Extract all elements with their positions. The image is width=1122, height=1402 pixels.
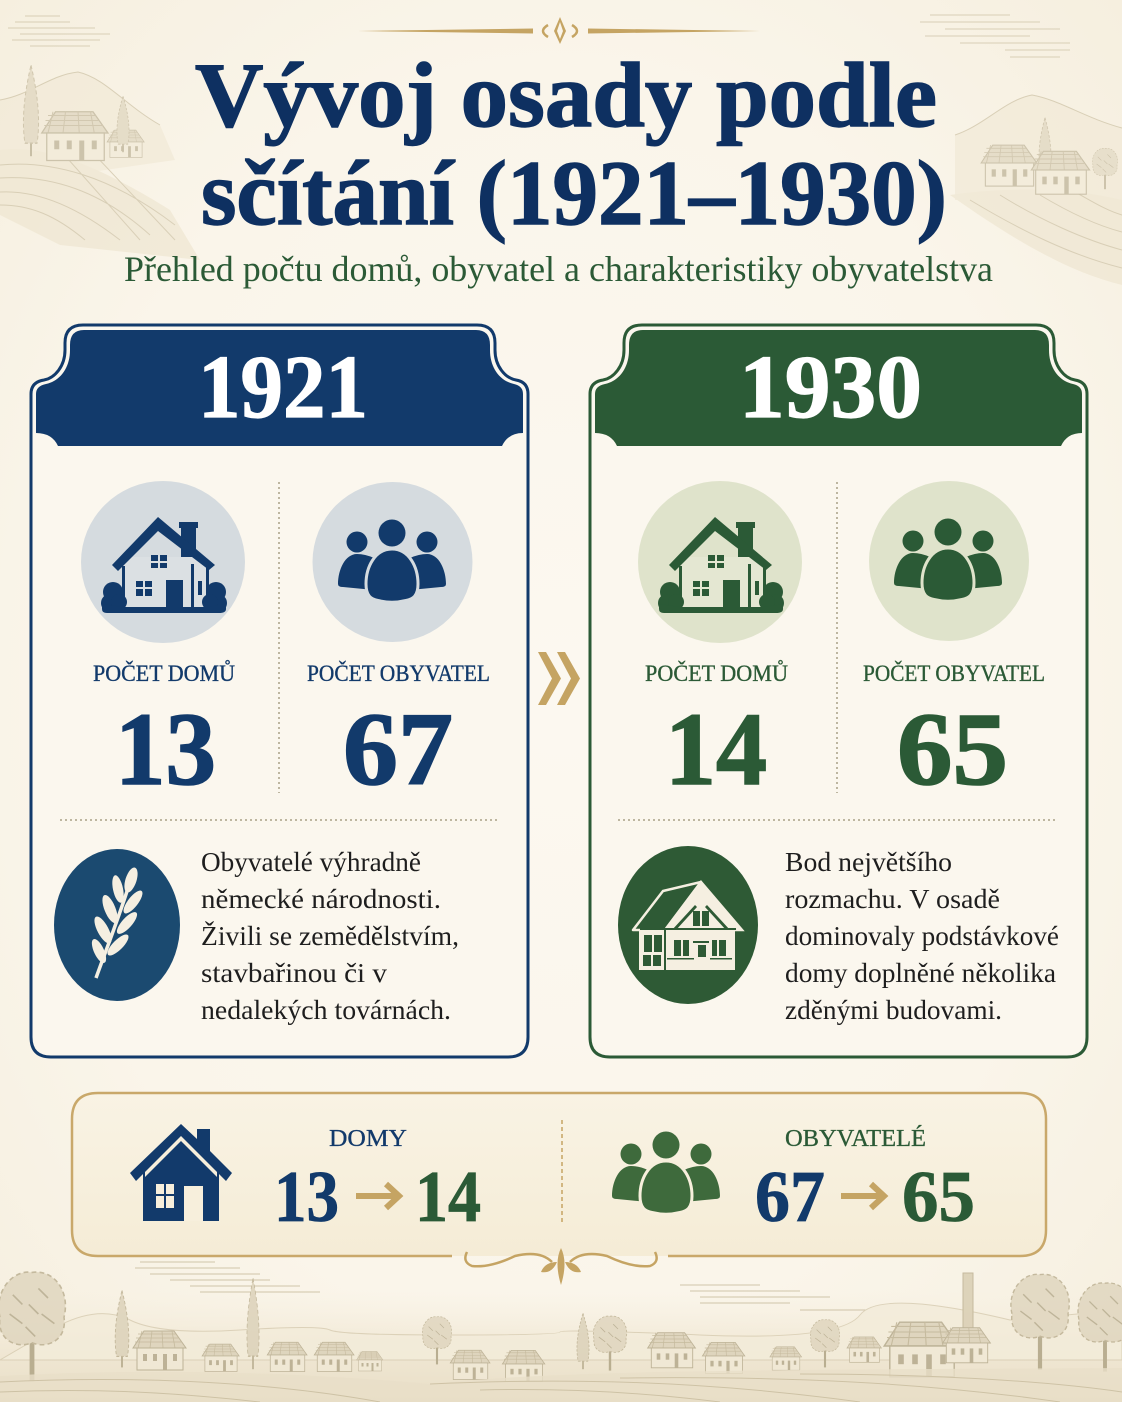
- illustration: village sketch top right: [920, 15, 1122, 285]
- illustration: village sketch bottom: [0, 1262, 1122, 1402]
- icon: house 1921: [81, 481, 245, 643]
- number: 14: 14: [665, 692, 767, 807]
- text: 1921 description: Živili se zemědělstvím,: [201, 921, 459, 951]
- horizontal divider: [60, 819, 500, 821]
- year 1930: 1930: [739, 338, 922, 437]
- text: 1930 description: Bod největšího: [785, 847, 952, 877]
- year 1921: 1921: [198, 338, 368, 437]
- title: sčítání (1921–1930): [201, 142, 947, 244]
- illustration: village sketch top left: [0, 16, 200, 260]
- summary frame: [72, 1093, 1046, 1256]
- label: domy: DOMY: [329, 1126, 407, 1152]
- icon: people 1921: [312, 482, 472, 642]
- panel: summary: [72, 1093, 1046, 1256]
- arrow: houses: [356, 1184, 399, 1208]
- text: 1921 description: německé národnosti.: [201, 884, 441, 914]
- label: domy: POČET DOMŮ: [645, 660, 788, 687]
- number: 65: 65: [897, 692, 1008, 807]
- title: Vývoj osady podle: [195, 44, 937, 146]
- card outline 1921: [31, 325, 528, 1057]
- number: 67: 67: [343, 692, 453, 807]
- label: obyvatel: POČET OBYVATEL: [307, 660, 490, 687]
- text: 1930 description: [785, 847, 1059, 1025]
- card outline 1930: [590, 325, 1087, 1057]
- text: 1921 description: [201, 847, 459, 1025]
- panel: 1921: [31, 325, 528, 1057]
- arrow: chevrons between cards: [538, 652, 580, 705]
- text: 1930 description: dominovaly podstávkové: [785, 921, 1059, 951]
- icon: wheat: [54, 849, 180, 1001]
- panel: 1930: [590, 325, 1087, 1057]
- horizontal divider: [618, 819, 1058, 821]
- number: 13: 13: [115, 692, 216, 807]
- text: 1921 description: stavbařinou či v: [201, 958, 388, 988]
- text: 1921 description: nedalekých továrnách.: [201, 995, 451, 1025]
- title: [195, 44, 947, 244]
- summary divider: [561, 1120, 563, 1222]
- ornament: top divider: [358, 17, 760, 44]
- icon: house 1930: [638, 481, 802, 643]
- label: obyvatel: POČET OBYVATEL: [863, 660, 1045, 687]
- icon: house summary: [130, 1124, 232, 1221]
- text: 1930 description: zděnými budovami.: [785, 995, 1002, 1025]
- icon: half-timbered house: [618, 846, 758, 1004]
- icon: people summary: [612, 1132, 720, 1214]
- number: 13: 13: [274, 1156, 339, 1237]
- label: domy: POČET DOMŮ: [93, 660, 235, 687]
- year banner 1921: [36, 330, 523, 446]
- text: 1930 description: domy doplněné několika: [785, 958, 1056, 988]
- arrow: residents: [841, 1184, 884, 1208]
- icon: people 1930: [869, 481, 1029, 641]
- label: obyvatele: OBYVATELÉ: [785, 1126, 926, 1152]
- number: 65: 65: [902, 1156, 975, 1237]
- vertical divider: [278, 482, 280, 793]
- number: 67: 67: [755, 1156, 825, 1237]
- text: 1930 description: rozmachu. V osadě: [785, 884, 1000, 914]
- vertical divider: [836, 482, 838, 793]
- text: 1921 description: Obyvatelé výhradně: [201, 847, 421, 877]
- subtitle: Přehled počtu domů, obyvatel a charakteristiky obyvatelstva: [124, 249, 993, 289]
- number: 14: 14: [415, 1156, 481, 1237]
- ornament: bottom flourish: [465, 1248, 657, 1285]
- year banner 1930: [595, 330, 1082, 446]
